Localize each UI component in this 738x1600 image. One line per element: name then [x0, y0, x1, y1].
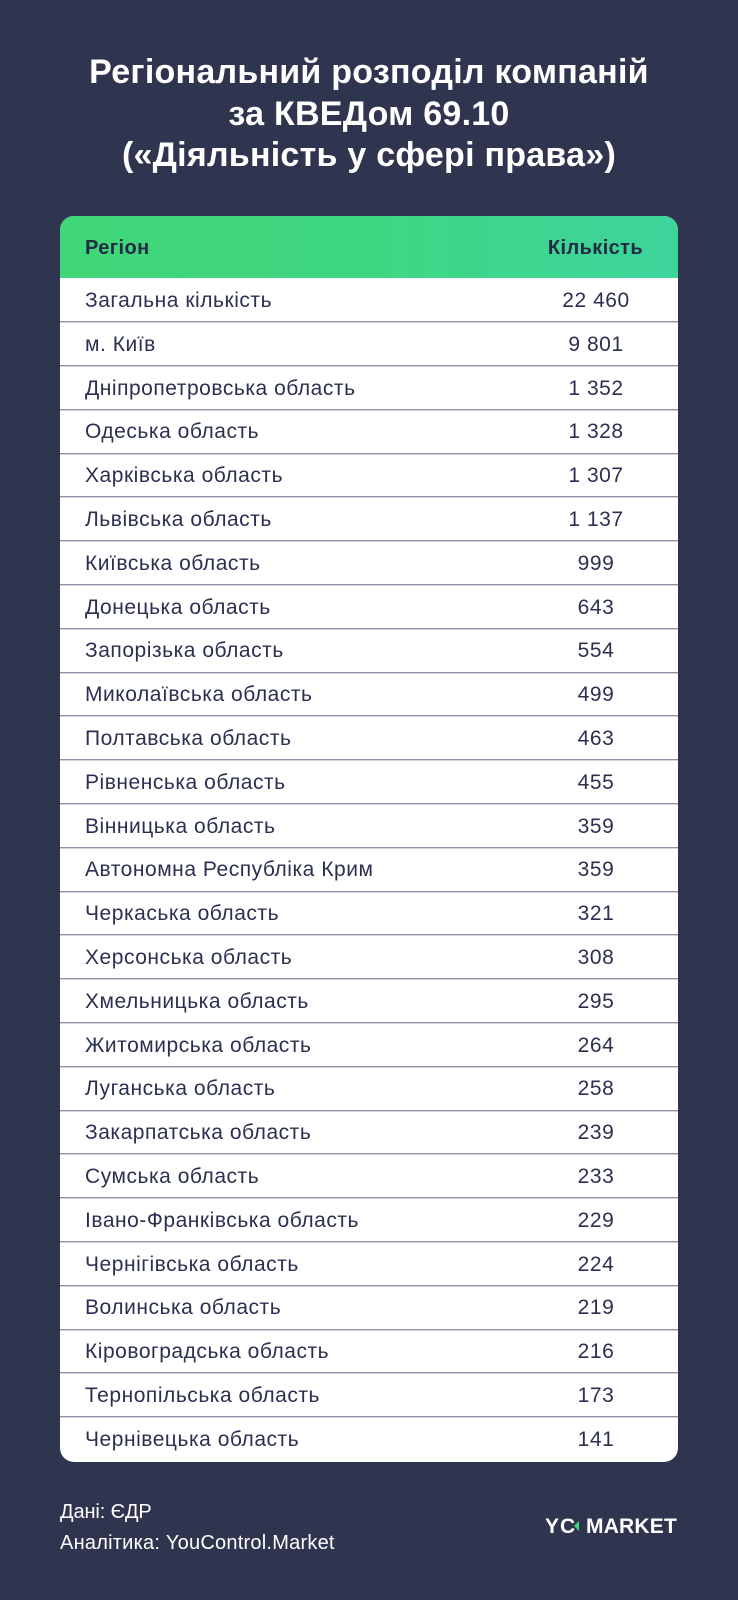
row: Chernihiv — [60, 1253, 678, 1287]
row: Odesa: Одеська область — [85, 420, 259, 443]
row: Kherson — [60, 946, 678, 980]
row: Ivano-Frankivsk: 229 — [578, 1209, 614, 1232]
row: Volyn — [60, 1296, 678, 1331]
row: Dnipropetrovsk: Дніпропетровська область — [85, 377, 356, 400]
row: Chernihiv: 224 — [578, 1253, 614, 1276]
row: Kherson: 308 — [578, 946, 614, 969]
row: Kharkiv — [60, 464, 678, 498]
row: Donetsk: 643 — [578, 596, 614, 619]
analytics note: Аналітика: YouControl.Market — [60, 1532, 335, 1554]
row: Lviv: Львівська область — [85, 508, 272, 531]
row: Zhytomyr: 264 — [578, 1034, 614, 1057]
row: Khmelnytskyi: Хмельницька область — [85, 990, 309, 1013]
row: Kirovohrad: 216 — [578, 1340, 614, 1363]
table header: Кількість — [548, 237, 643, 259]
row: total — [60, 289, 678, 323]
row: Kyiv region: 999 — [578, 552, 614, 575]
title: за КВЕДом 69.10 — [228, 94, 510, 132]
row: Cherkasy — [60, 902, 678, 936]
row: Poltava: Полтавська область — [85, 727, 291, 750]
row: Luhansk — [60, 1077, 678, 1112]
row: Kharkiv: Харківська область — [85, 464, 283, 487]
row: Ivano-Frankivsk: Івано-Франківська область — [85, 1209, 359, 1232]
row: Vinnytsia: Вінницька область — [85, 815, 276, 838]
row: Zaporizhzhia — [60, 639, 678, 674]
title — [89, 53, 649, 174]
row: Chernivtsi — [85, 1428, 614, 1451]
row: Cherkasy: 321 — [578, 902, 614, 925]
row: Chernivtsi: 141 — [578, 1428, 614, 1451]
row: total: 22 460 — [562, 289, 630, 312]
row: Kirovohrad: Кіровоградська область — [85, 1340, 329, 1363]
row: Vinnytsia: 359 — [578, 815, 614, 838]
row: Volyn: 219 — [578, 1296, 614, 1319]
row: Kirovohrad — [60, 1340, 678, 1374]
row: Kyiv region — [60, 552, 678, 586]
row: Ternopil: 173 — [578, 1384, 614, 1407]
logo: YC Market: YC — [545, 1515, 576, 1538]
row: total: Загальна кількість — [85, 289, 272, 312]
logo: YC Market — [545, 1515, 677, 1538]
row: Kyiv city — [60, 333, 678, 367]
title: Регіональний розподіл компаній — [89, 53, 649, 91]
row: Sumy — [60, 1165, 678, 1199]
table header — [60, 216, 678, 278]
row: Ternopil — [60, 1384, 678, 1418]
row: Zakarpattia: 239 — [578, 1121, 614, 1144]
row: Mykolaiv: Миколаївська область — [85, 683, 313, 706]
logo: YC Market: MARKET — [586, 1515, 677, 1538]
title: («Діяльність у сфері права») — [122, 136, 616, 174]
row: Chernihiv: Чернігівська область — [85, 1253, 299, 1276]
row: Zakarpattia: Закарпатська область — [85, 1121, 311, 1144]
row: Crimea: Автономна Республіка Крим — [85, 858, 373, 881]
row: Zhytomyr — [60, 1034, 678, 1068]
row: Odesa: 1 328 — [568, 420, 624, 443]
row: Chernivtsi: Чернівецька область — [85, 1428, 299, 1451]
row: Ivano-Frankivsk — [60, 1209, 678, 1243]
row: Zhytomyr: Житомирська область — [85, 1034, 311, 1057]
table panel — [60, 216, 678, 1462]
row: Zakarpattia — [60, 1121, 678, 1155]
row: Odesa — [60, 420, 678, 455]
row: Mykolaiv: 499 — [578, 683, 614, 706]
row: Kyiv city: 9 801 — [568, 333, 624, 356]
row: Dnipropetrovsk — [60, 377, 678, 411]
row: Khmelnytskyi — [60, 990, 678, 1024]
row: Zaporizhzhia: 554 — [578, 639, 614, 662]
row: Volyn: Волинська область — [85, 1296, 281, 1319]
row: Kyiv city: м. Київ — [85, 333, 156, 356]
table header: Регіон — [85, 237, 150, 259]
row: Zaporizhzhia: Запорізька область — [85, 639, 284, 662]
row: Donetsk: Донецька область — [85, 596, 271, 619]
row: Ternopil: Тернопільська область — [85, 1384, 320, 1407]
row: Cherkasy: Черкаська область — [85, 902, 279, 925]
row: Kharkiv: 1 307 — [568, 464, 624, 487]
row: Crimea: 359 — [578, 858, 614, 881]
row: Poltava — [60, 727, 678, 761]
row: Dnipropetrovsk: 1 352 — [568, 377, 624, 400]
row: Lviv — [60, 508, 678, 542]
row: Sumy: 233 — [578, 1165, 614, 1188]
source note: Дані: ЄДР — [60, 1501, 152, 1523]
row: Poltava: 463 — [578, 727, 614, 750]
row: Rivne — [60, 771, 678, 805]
row: Crimea — [60, 858, 678, 893]
row: Mykolaiv — [60, 683, 678, 717]
row: Donetsk — [60, 596, 678, 630]
row: Rivne: Рівненська область — [85, 771, 286, 794]
row: Vinnytsia — [60, 815, 678, 849]
row: Sumy: Сумська область — [85, 1165, 259, 1188]
row: Kherson: Херсонська область — [85, 946, 292, 969]
row: Khmelnytskyi: 295 — [578, 990, 614, 1013]
row: Lviv: 1 137 — [568, 508, 624, 531]
row: Luhansk: Луганська область — [85, 1077, 275, 1100]
row: Luhansk: 258 — [578, 1077, 614, 1100]
row: Rivne: 455 — [578, 771, 614, 794]
row: Kyiv region: Київська область — [85, 552, 261, 575]
